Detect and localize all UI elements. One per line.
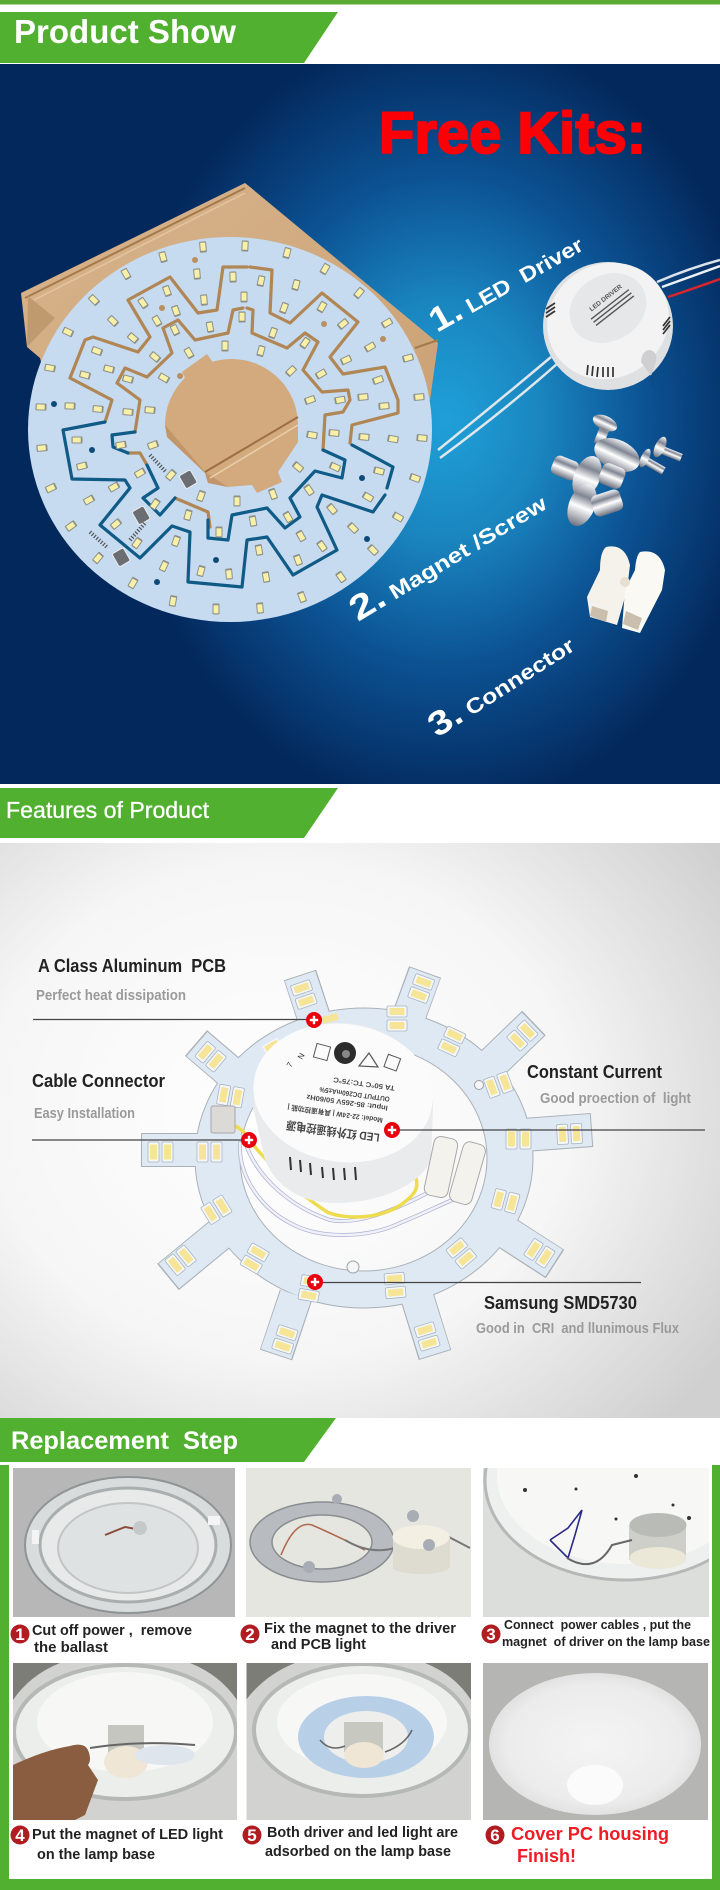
LED driver cylinder: TA 50°C TC:75°C (333, 1075, 395, 1092)
photo 1: open lamp base (13, 1468, 235, 1617)
small connectors (211, 1106, 487, 1206)
copper traces (tan) (70, 267, 398, 527)
LED driver cylinder: N (296, 1051, 307, 1061)
LED driver cylinder: LED 红外线遥控电源 (285, 1118, 380, 1145)
callout: A Class Aluminum PCB: Perfect heat dissipation (36, 988, 186, 1004)
step 2 caption: and PCB light (271, 1637, 366, 1653)
step 5 caption: Both driver and led light are (267, 1825, 458, 1841)
callout: A Class Aluminum PCB: A Class Aluminum PCB (38, 956, 226, 976)
step 5 caption (242, 1825, 458, 1860)
photo 2: magnets on PCB ring and driver (246, 1468, 471, 1617)
banner: Product Show (0, 12, 338, 63)
step 1 caption (10, 1623, 192, 1656)
step 4 caption: Put the magnet of LED light (32, 1827, 223, 1843)
LED pairs on ring (387, 1006, 407, 1031)
callout: Constant Current: Good proection of light (540, 1091, 691, 1107)
step 3 caption (482, 1617, 710, 1649)
callout: Samsung SMD5730 (307, 1274, 679, 1337)
LED pairs on spokes (290, 979, 317, 1010)
callout: Cable Connector (32, 1071, 257, 1148)
icon: connector (587, 546, 665, 633)
step 1 caption: 1 (15, 1625, 25, 1644)
spokes outline (141, 972, 592, 1355)
LED driver cylinder: Input: 85-265V 50/60Hz (306, 1093, 388, 1111)
item label: Magnet / Screw: 2. Magnet /Screw (342, 481, 553, 629)
step 6 caption: Finish! (517, 1846, 576, 1866)
step 6 caption: Cover PC housing (511, 1824, 669, 1844)
step 3 caption: 3 (486, 1625, 496, 1644)
callout: Cable Connector: Easy Installation (34, 1106, 135, 1122)
step 5 caption: 5 (247, 1826, 257, 1845)
icon: magnets and screws (549, 411, 683, 530)
callout: Samsung SMD5730: Samsung SMD5730 (484, 1293, 637, 1313)
banner: Features of Product (0, 788, 338, 838)
icon: LED driver (526, 241, 720, 401)
item label: LED Driver: 1. LED Driver (422, 223, 589, 340)
LED driver cylinder: 7 (285, 1060, 295, 1069)
PCB mounting holes (159, 257, 386, 379)
step 4 caption (10, 1826, 223, 1863)
step 1 caption: Cut off power , remove (32, 1623, 192, 1639)
top green bar (0, 0, 720, 4)
spokes (142, 973, 591, 1354)
panel: features gray background (0, 843, 720, 1418)
panel: product show blue background (0, 64, 720, 784)
LED ring board (141, 972, 592, 1355)
step 4 caption: on the lamp base (37, 1847, 155, 1863)
kraft centre hole with fold (165, 354, 298, 493)
PCB small components (90, 455, 198, 567)
white wires behind PCB (438, 357, 558, 458)
step 1 caption: the ballast (34, 1640, 108, 1656)
LEDs bottom half (35, 402, 428, 614)
copper traces (navy) (63, 422, 393, 587)
LED driver cylinder: OUTPUT DC260mA±5% (318, 1085, 390, 1102)
banner: Product Show: Product Show (14, 13, 236, 50)
photo 4: hand placing LED light (13, 1663, 237, 1820)
LED driver cylinder (244, 1012, 442, 1203)
step 2 caption: 2 (245, 1625, 255, 1644)
photo 5: PCB in lamp base (246, 1663, 471, 1820)
callout: A Class Aluminum PCB (33, 956, 322, 1028)
heading: Free Kits: Free Kits: (379, 101, 646, 166)
LED PCB disc (28, 237, 432, 622)
step 2 caption (240, 1621, 456, 1653)
photo 6: finished PC cover (483, 1663, 708, 1820)
banner: Replacement Step: Replacement Step (11, 1427, 238, 1455)
step 6 caption: 6 (490, 1826, 500, 1845)
step 6 caption (486, 1824, 669, 1866)
item label: Connector: 3. Connector (421, 624, 580, 745)
LEDs top half (44, 240, 425, 405)
callout: Constant Current (384, 1062, 705, 1138)
step 4 caption: 4 (15, 1826, 25, 1845)
LED driver cylinder: Model: 22-24W | 具有遥控功能 | (287, 1103, 383, 1125)
photo 3: driver in lamp base with cables (483, 1468, 709, 1617)
icon: LED driver: LED DRIVER (588, 283, 624, 313)
banner: Replacement Step (0, 1418, 336, 1462)
callout: Cable Connector: Cable Connector (32, 1071, 165, 1091)
panel: replacement steps frame (0, 1465, 720, 1890)
callout: Constant Current: Constant Current (527, 1062, 662, 1082)
wires (233, 1125, 457, 1235)
step 2 caption: Fix the magnet to the driver (264, 1621, 456, 1637)
step 3 caption: Connect power cables , put the (504, 1617, 691, 1632)
step 3 caption: magnet of driver on the lamp base (502, 1634, 710, 1649)
callout: Samsung SMD5730: Good in CRI and llunimous Flux (476, 1321, 679, 1337)
cardboard box (21, 183, 438, 520)
ring shape (195, 1008, 533, 1308)
step 5 caption: adsorbed on the lamp base (265, 1844, 451, 1860)
banner: Features of Product: Features of Product (6, 797, 210, 823)
